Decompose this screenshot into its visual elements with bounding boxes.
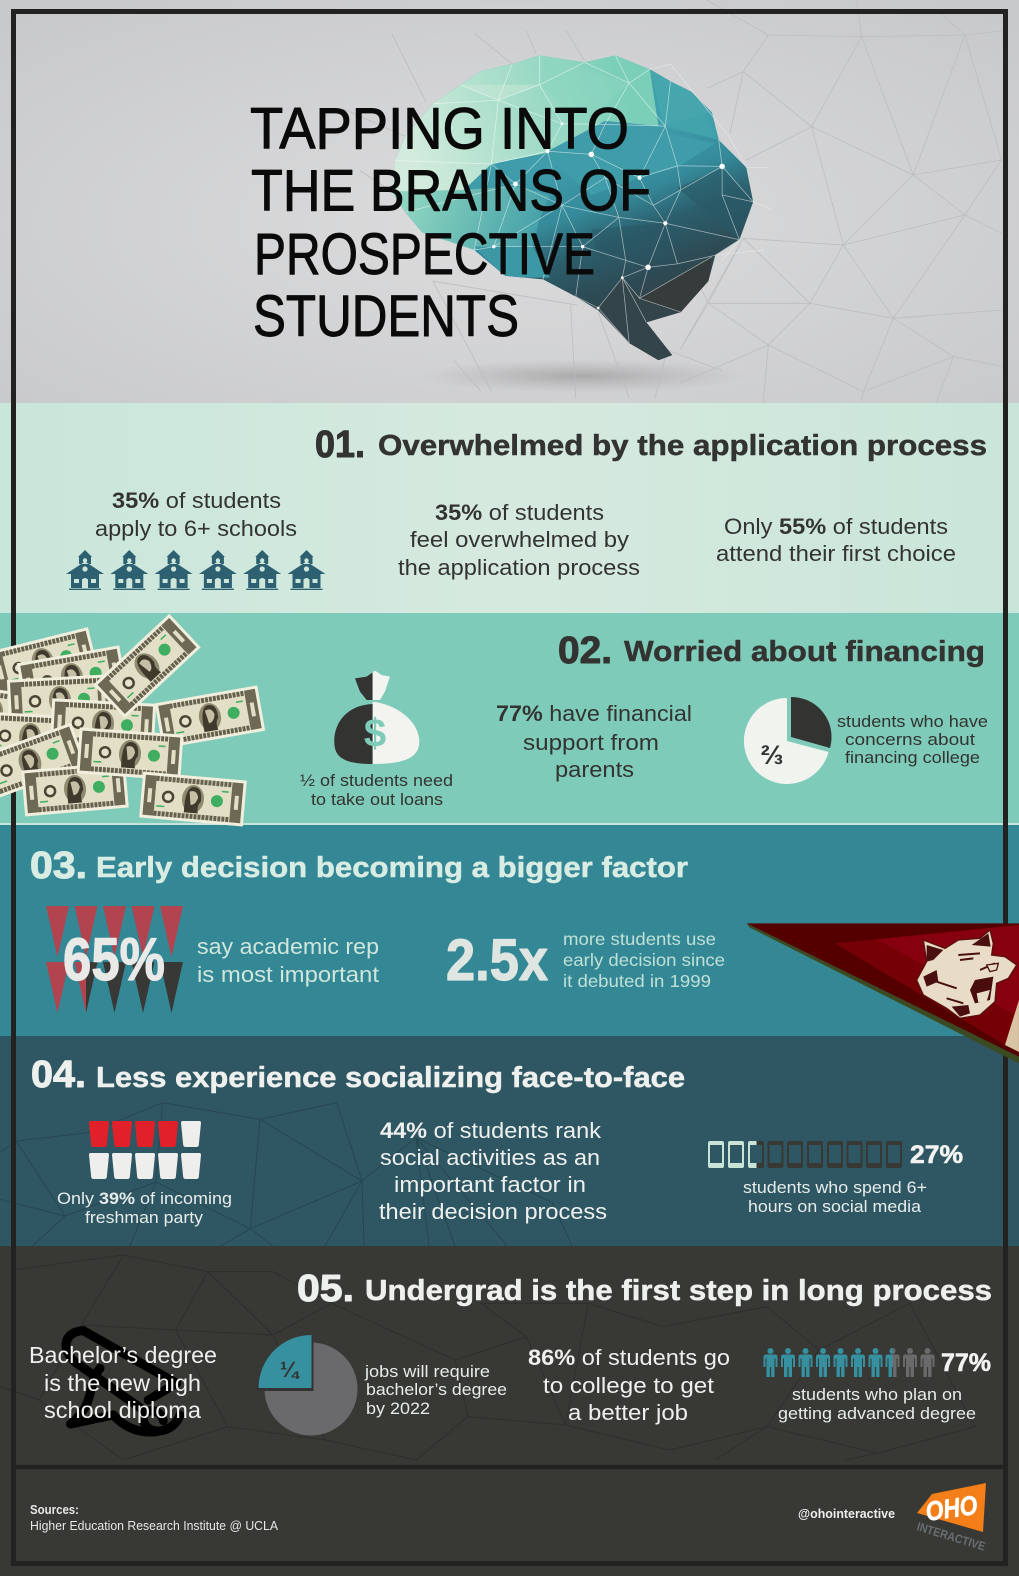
stat: 35% apply: apply to 6+ schools [95,516,297,541]
stat: 55% first choice: attend their first choice [716,541,956,566]
stat: 55% first choice [716,514,956,566]
icon: money bag: $ [364,712,386,756]
caption: financing concerns [837,713,988,767]
stat: 86% better job: a better job [568,1400,688,1425]
caption: jobs [364,1363,507,1418]
text: bachelor's degree: is the new high [44,1370,201,1396]
icons: schoolhouses [66,550,326,590]
pie chart: one quarter [256,1335,358,1436]
stat: academic rep: say academic rep [197,934,379,959]
caption: advanced degree: getting advanced degree [778,1405,976,1423]
heading 02: Worried about financing [624,636,985,668]
stat: 86% better job: to college to get [543,1373,715,1398]
heading 04 [31,1054,685,1096]
text: bachelor's degree: school diploma [44,1397,201,1423]
heading 05: Undergrad is the first step in long process [365,1275,992,1307]
icon: money bag [334,671,419,764]
caption: advanced degree [778,1386,976,1423]
mesh lines [0,1103,572,1246]
text: bachelor's degree [29,1342,217,1423]
icons: party cups [89,1121,201,1179]
icon: diploma scroll [66,1331,180,1432]
stat: 77% support: parents [555,757,634,782]
pie chart: two thirds: ⅔ [761,740,783,770]
stat: 35% overwhelmed: 35% of students [435,500,604,525]
sources: Higher Education Research Institute @ UCLA [30,1519,279,1533]
mesh lines [0,1255,975,1460]
caption: social media: hours on social media [748,1198,922,1216]
heading 04: 04. [31,1054,86,1096]
caption: social media [743,1179,927,1216]
caption: half need loans [300,772,453,809]
stat: 77% support: support from [523,730,659,755]
icons: people [764,1348,934,1377]
caption: half need loans: to take out loans [311,791,443,809]
heading 03 [30,845,688,887]
stat: 55% first choice: Only 55% of students [724,514,948,539]
title: THE BRAINS OF [251,158,651,224]
stat: 2.5x: 2.5x [446,928,548,993]
caption: freshman party: Only 39% of incoming [57,1190,232,1208]
title [250,96,651,349]
panel: 03 early decision [0,825,1019,1036]
heading 01 [315,424,987,466]
caption: early decision growth: more students use [563,929,716,949]
panel: 04 socializing [0,1036,1019,1246]
social handle: @ohointeractive [798,1507,895,1521]
stat: 35% overwhelmed [398,500,640,580]
stat: 44% social [379,1118,607,1224]
stat: 77%: 77% [941,1349,991,1377]
panel: 02 financing [0,613,1019,825]
heading 05: 05. [297,1268,354,1310]
logo: OHO Interactive: INTERACTIVE [915,1519,987,1554]
stat: academic rep [197,934,380,987]
stat: 35% overwhelmed: the application process [398,555,640,580]
chart: pennant pictogram 65%: 65% [63,926,165,993]
sources [30,1503,279,1533]
caption: half need loans: ½ of students need [300,772,453,790]
heading 03: 03. [30,845,87,887]
pie chart: one quarter: ¼ [280,1357,300,1382]
pie chart: two thirds [744,697,832,784]
brain shadow [417,359,747,393]
stat: 77% support: 77% have financial [496,701,692,726]
illustration: dollar bills [0,614,265,826]
caption: freshman party [57,1190,232,1227]
stat: 44% social: their decision process [379,1199,607,1224]
illustration: cougar pennant [747,923,1019,1063]
brain illustration [392,56,770,360]
title: STUDENTS [253,284,519,349]
stat: 44% social: 44% of students rank [380,1118,602,1143]
panel: 01 overwhelmed [0,403,1019,614]
cougar head [917,930,1017,1018]
heading 04: Less experience socializing face-to-face [96,1062,685,1094]
stat: 35% overwhelmed: feel overwhelmed by [410,527,629,552]
caption: freshman party: freshman party [85,1209,204,1227]
background mesh lines right [680,0,1008,402]
heading 02 [558,630,985,672]
heading 03: Early decision becoming a bigger factor [96,852,688,884]
caption: jobs: bachelor’s degree [366,1381,507,1399]
heading 01: 01. [315,424,365,466]
logo: OHO Interactive [915,1483,987,1554]
heading 01: Overwhelmed by the application process [378,430,987,462]
caption: social media: students who spend 6+ [743,1179,927,1197]
caption: jobs: by 2022 [366,1400,430,1418]
logo: OHO Interactive: OHO [924,1490,979,1527]
stat: 86% better job: 86% of students go [528,1345,730,1370]
chart: pennant pictogram 65% [46,906,183,1013]
icons: phones [708,1141,902,1168]
caption: jobs: jobs will require [364,1363,490,1381]
heading 05 [297,1268,992,1310]
background mesh lines left [343,30,722,398]
sources: Sources: [30,1503,79,1517]
stat: academic rep: is most important [197,962,380,987]
title: PROSPECTIVE [254,222,595,287]
caption: early decision growth: early decision since [563,950,725,970]
panel: 05 undergrad [30,1246,991,1551]
stat: 35% apply: 35% of students [112,488,281,513]
caption: financing concerns: students who have [837,713,988,731]
caption: advanced degree: students who plan on [792,1386,962,1404]
stat: 35% apply [95,488,297,541]
panel: header [0,0,1019,404]
stat: 44% social: social activities as an [380,1145,600,1170]
caption: early decision growth: it debuted in 1999 [563,971,711,991]
stat: 86% better job [528,1345,730,1425]
title: TAPPING INTO [250,96,629,162]
text: bachelor's degree: Bachelor’s degree [29,1342,217,1368]
caption: financing concerns: concerns about [845,731,975,749]
stat: 44% social: important factor in [394,1172,586,1197]
caption: early decision growth [563,929,725,991]
stat: 77% support [496,701,692,782]
stat: 27%: 27% [910,1141,963,1169]
caption: financing concerns: financing college [845,749,980,767]
heading 02: 02. [558,630,612,672]
